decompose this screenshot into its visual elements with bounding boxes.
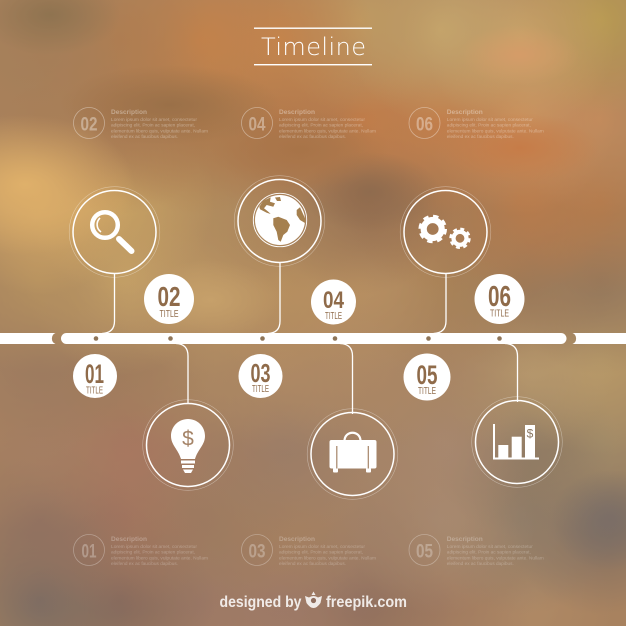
description block 01: eleifend ex ac faucibus dapibus. [111,561,178,567]
icon circle: search [69,187,160,277]
description block 03 [242,534,376,567]
description block 02: elementum libero quis, vulputate ante. Nullam [111,128,208,134]
badge 05: TITLE [418,385,436,397]
description block 02: 02 [80,114,98,136]
description block 06: adipiscing elit. Proin ac sapien placerat, [447,123,531,129]
description block 03: Lorem ipsum dolor sit amet, consectetur [279,544,365,550]
description block 01: Lorem ipsum dolor sit amet, consectetur [111,544,197,550]
description block 02: eleifend ex ac faucibus dapibus. [111,134,178,140]
badge 02: TITLE [160,308,178,320]
badge 06: 06 [488,281,511,313]
description block 02 [74,108,208,140]
description block 05: adipiscing elit. Proin ac sapien placerat, [447,550,531,556]
badge 01: TITLE [86,386,103,396]
badge 01: 01 [85,359,104,389]
description block 04: elementum libero quis, vulputate ante. Nullam [279,128,376,134]
badge 05: 05 [416,360,438,390]
badge 04 [311,280,356,324]
footer credit [220,592,407,611]
description block 04: Lorem ipsum dolor sit amet, consectetur [279,117,365,123]
badge 06 [474,274,524,324]
footer credit: freepik.com [326,594,407,611]
description block 01: 01 [82,540,97,562]
description block 06: Lorem ipsum dolor sit amet, consectetur [447,117,533,123]
description block 05: eleifend ex ac faucibus dapibus. [447,561,514,567]
description block 01: elementum libero quis, vulputate ante. Nullam [111,555,208,561]
icon circle: bar chart [472,397,562,487]
badge 03: 03 [250,358,270,388]
description block 03: adipiscing elit. Proin ac sapien placerat, [279,550,363,556]
description block 04 [242,108,376,140]
description block 01: adipiscing elit. Proin ac sapien placerat, [111,550,195,556]
description block 03: eleifend ex ac faucibus dapibus. [279,561,346,567]
icon: dollar lightbulb: $ [182,428,194,450]
icon: globe [253,193,307,247]
description block 05: elementum libero quis, vulputate ante. Nullam [447,555,544,561]
description block 04: Description [279,109,315,116]
description block 05: Description [447,536,483,543]
icon circle: suitcase [307,409,398,499]
description block 05: Lorem ipsum dolor sit amet, consectetur [447,544,533,550]
description block 01 [74,534,208,567]
description block 04: eleifend ex ac faucibus dapibus. [279,134,346,140]
description block 03: Description [279,536,315,543]
description block 04: adipiscing elit. Proin ac sapien placerat, [279,123,363,129]
badge 03 [238,354,282,398]
description block 04: 04 [248,114,266,136]
icon: gears [420,216,470,248]
description block 03: elementum libero quis, vulputate ante. Nullam [279,555,376,561]
description block 02: adipiscing elit. Proin ac sapien placerat, [111,123,195,129]
icon circle: gears [400,187,491,277]
description block 02: Lorem ipsum dolor sit amet, consectetur [111,117,197,123]
title [254,28,372,65]
badge 02: 02 [158,281,180,312]
description block 06 [409,108,544,140]
badge 04: 04 [323,287,345,314]
description block 06: 06 [416,114,433,136]
description block 05: 05 [416,540,433,562]
icon: suitcase [330,433,376,472]
footer credit: designed by [220,594,302,611]
badge 03: TITLE [252,384,269,395]
description block 06: elementum libero quis, vulputate ante. Nullam [447,128,544,134]
description block 06: Description [447,109,483,116]
badge 01 [73,354,117,398]
badge 05 [404,354,450,400]
description block 06: eleifend ex ac faucibus dapibus. [447,134,514,140]
description block 05 [409,534,544,567]
icon circle: globe [234,176,325,266]
title: Timeline [261,33,366,61]
timeline bar [0,333,626,344]
icon: freepik logo [305,592,322,608]
badge 06: TITLE [490,308,509,320]
icon: bar chart: $ [527,426,534,440]
description block 03: 03 [248,540,266,562]
icon: magnifier [92,212,132,251]
badge 02 [144,274,194,324]
description block 02: Description [111,109,147,116]
icon circle: lightbulb [143,400,233,490]
description block 01: Description [111,536,147,543]
badge 04: TITLE [325,310,342,322]
connector lines [102,262,518,414]
